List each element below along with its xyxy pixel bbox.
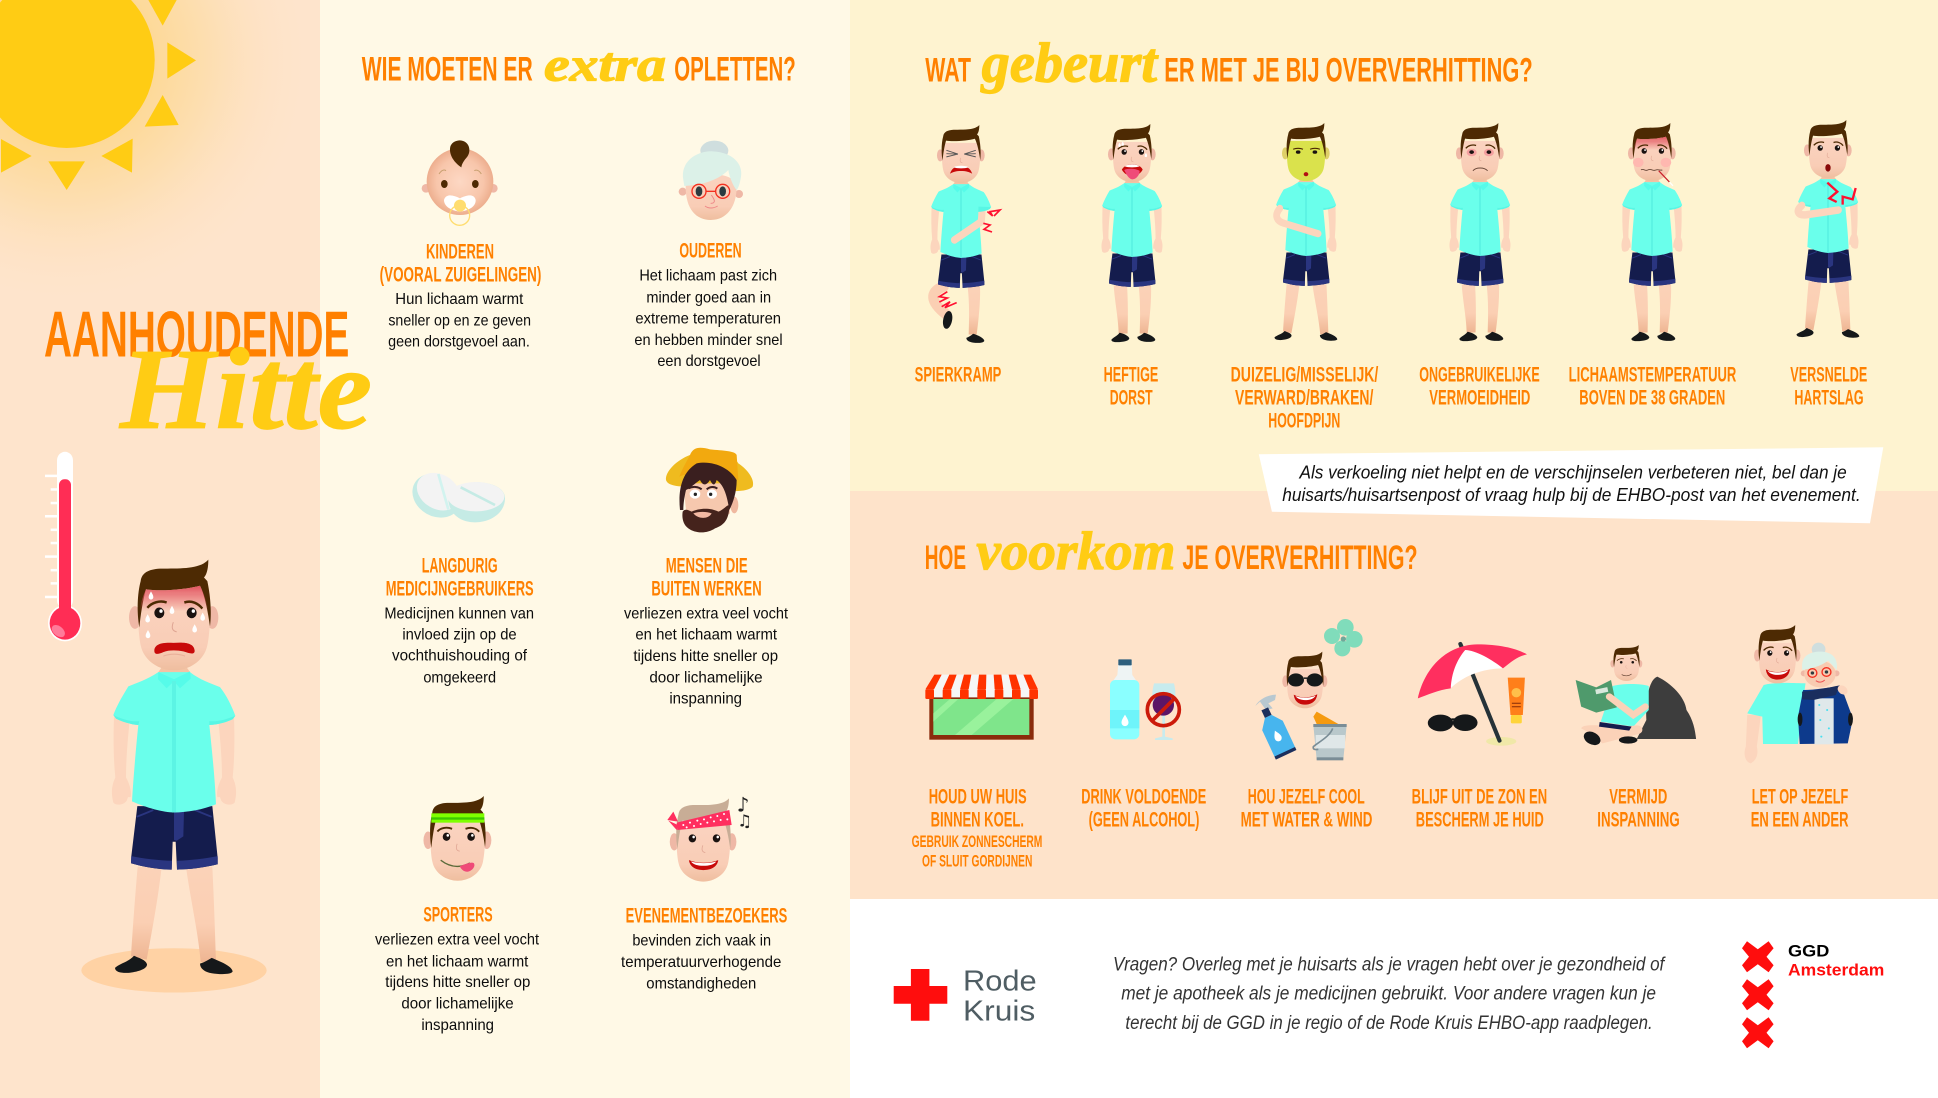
label: MET WATER & WIND [1241,808,1372,832]
symptom: heftige dorst [1101,124,1163,410]
heading: wat gebeurt er met je bij oververhitting [925,33,1533,95]
text: evenementbezoekers: bevinden zich vaak in [632,932,771,949]
heading: kinderen: (VOORAL ZUIGELINGEN) [380,263,541,287]
label: LICHAAMSTEMPERATUUR [1569,363,1737,387]
logo: rode kruis [894,966,1037,1028]
label: GEBRUIK ZONNESCHERM [912,832,1042,851]
symptom: duizelig [1231,123,1378,433]
symptom: ongebruikelijke vermoeidheid [1419,123,1540,410]
text: ouderen [634,267,783,370]
title line: aanhoudende: AANHOUDENDE [44,299,349,371]
illustration: nauseous man with green face [1274,123,1337,341]
text: evenementbezoekers: omstandigheden [646,975,756,992]
label: DORST [1110,386,1153,410]
icon: window with awning [925,675,1038,740]
illustration: man holding chest [1796,120,1859,338]
icon: grandmother [679,141,743,220]
illustration: overheated man [81,560,267,992]
heading: hoe voorkom je oververhitting: HOE [925,539,966,577]
logo: rode kruis: Rode [963,966,1037,998]
text: kinderen [388,291,531,351]
heading: buiten werken [651,554,762,601]
sun with rays [0,0,258,252]
text: sporters: tijdens hitte sneller op [385,974,530,991]
panel: prevention background [850,491,1938,899]
callout: bel hulp: Als verkoeling niet helpt en de verschijnselen verbeteren niet, bel dan je [1299,461,1847,482]
symptom: versnelde hartslag [1790,120,1867,410]
label: (GEEN ALCOHOL) [1089,808,1199,832]
label: HOU JEZELF COOL [1248,785,1365,809]
label: VERWARD/BRAKEN/ [1235,386,1373,410]
text: sporters: en het lichaam warmt [386,953,529,970]
illustration: man with cramp [930,125,1000,343]
icon: baby [422,140,498,225]
label: LET OP JEZELF [1752,785,1848,809]
tip: let op elkaar [1745,625,1853,832]
icon: man with sunglasses, fan, spray and bucket [1254,619,1363,760]
tip: inspanning [1576,645,1696,832]
label [1412,785,1547,832]
heading: wat gebeurt er met je bij oververhitting: gebeurt [980,33,1158,95]
music notes: ♪ [737,793,749,817]
icon: man reading against a rock [1576,645,1696,748]
heading: hoe voorkom je oververhitting: voorkom [976,521,1175,581]
logo: rode kruis: Kruis [963,996,1035,1028]
icon: water bottle and no wine [1110,659,1179,740]
label: DUIZELIG/MISSELIJK/ [1231,363,1378,387]
heading: sporters: SPORTERS [423,903,493,927]
label: BLIJF UIT DE ZON EN [1412,785,1547,809]
group: medicijngebruikers [384,465,534,686]
text: sporters [375,931,540,1034]
text: medicijngebruikers: vochthuishouding of [392,648,528,665]
panel: who should watch out background [320,0,850,1098]
text: kinderen: Hun lichaam warmt [395,291,524,308]
text: vragen: met je apotheek als je medicijnen gebruikt. Voor andere vragen kun je [1121,984,1656,1004]
heading: wat gebeurt er met je bij oververhitting: WAT [925,52,971,90]
heading: hoe voorkom je oververhitting: JE OVERVERHITTING? [1182,539,1418,577]
heading: buiten werken: MENSEN DIE [666,554,748,578]
label: OF SLUIT GORDIJNEN [922,852,1032,871]
illustration: tired man [1449,123,1511,341]
label: BESCHERM JE HUID [1416,808,1544,832]
label: VERMIJD [1609,785,1667,809]
illustration: feverish man with thermometer [1621,123,1683,341]
heading: ouderen: OUDEREN [679,239,742,263]
heading: kinderen [380,240,541,287]
symptom: spierkramp [915,125,1001,387]
icon: pills [404,465,505,526]
icon: man with arm around elderly woman [1745,625,1853,763]
heading: hoe voorkom je oververhitting [925,521,1418,581]
logo: ggd amsterdam: GGD [1788,942,1829,961]
label [1790,363,1867,410]
heading: buiten werken: BUITEN WERKEN [651,577,762,601]
text: medicijngebruikers [384,605,534,686]
heading: wie moeten er extra opletten: OPLETTEN? [674,51,796,89]
label [1751,785,1849,832]
icon: red cross [894,969,947,1021]
text: vragen [1113,954,1666,1034]
text: buiten werken: verliezen extra veel vocht [624,605,789,622]
text: vragen: terecht bij de GGD in je regio of de Rode Kruis EHBO-app raadplegen. [1125,1013,1653,1034]
panel: footer background [850,899,1938,1098]
label: INSPANNING [1597,808,1680,832]
label [1104,363,1158,410]
icon: farmer with hat [666,448,753,532]
label: BINNEN KOEL. [931,808,1024,832]
tip: drinken [1081,659,1206,832]
label: VERMOEIDHEID [1429,386,1530,410]
symptom: lichaamstemperatuur [1569,123,1737,410]
text: sporters: verliezen extra veel vocht [375,931,540,948]
group: sporters [375,796,540,1034]
tip: zon [1412,644,1547,832]
text: kinderen: sneller op en ze geven [388,313,531,330]
heading: wat gebeurt er met je bij oververhitting: ER MET JE BIJ OVERVERHITTING? [1164,52,1533,90]
text: ouderen: en hebben minder snel [634,332,783,349]
label: SPIERKRAMP [915,363,1001,387]
text: ouderen: extreme temperaturen [635,310,781,327]
text: ouderen: Het lichaam past zich [639,267,777,284]
heading: medicijngebruikers: LANGDURIG [422,554,498,578]
label [1241,785,1372,832]
logo: ggd amsterdam: Amsterdam [1788,961,1884,980]
label [1419,363,1540,410]
illustration: thirsty man [1101,124,1163,342]
label: ONGEBRUIKELIJKE [1419,363,1540,387]
text: buiten werken [624,605,789,707]
label: VERSNELDE [1790,363,1867,387]
group: evenementbezoekers [621,793,787,992]
music notes [737,793,752,831]
icon: parasol, sunglasses and sunscreen [1418,644,1527,746]
panel: left background [0,0,320,1098]
label: HARTSLAG [1794,386,1864,410]
music notes: ♫ [737,812,752,831]
text: kinderen: geen dorstgevoel aan. [388,334,530,351]
text: buiten werken: inspanning [669,690,742,707]
text: medicijngebruikers: Medicijnen kunnen van [384,605,534,622]
text: medicijngebruikers: omgekeerd [423,669,496,686]
title [44,299,372,454]
heading: medicijngebruikers [386,554,534,601]
group: ouderen [634,141,783,370]
icon: festival visitor with bandana and music notes [667,793,752,882]
label [1081,785,1206,832]
text: sporters: door lichamelijke [401,995,514,1012]
tip: cool [1241,619,1372,832]
icon: athlete head with headband [423,796,491,881]
heading: medicijngebruikers: MEDICIJNGEBRUIKERS [386,577,534,601]
label: HEFTIGE [1104,363,1158,387]
label: HOOFDPIJN [1268,409,1340,433]
text: buiten werken: en het lichaam warmt [635,626,778,643]
text: ouderen: een dorstgevoel [657,353,761,370]
tip: huis koel [912,675,1042,871]
group: kinderen [380,140,541,351]
text: buiten werken: door lichamelijke [649,669,763,686]
label [912,785,1042,871]
label: BOVEN DE 38 GRADEN [1579,386,1725,410]
title line: hitte: Hitte [119,326,372,454]
text: medicijngebruikers: invloed zijn op de [402,626,517,643]
text: vragen: Vragen? Overleg met je huisarts als je vragen hebt over je gezondheid of [1113,954,1666,976]
text: evenementbezoekers: temperatuurverhogende [621,954,781,971]
label [1597,785,1680,832]
text: sporters: inspanning [421,1017,494,1034]
callout: bel hulp [1259,447,1883,523]
label: EN EEN ANDER [1751,808,1849,832]
text: buiten werken: tijdens hitte sneller op [633,648,778,665]
text: evenementbezoekers [621,932,781,992]
heading: kinderen: KINDEREN [426,240,494,264]
heading: wie moeten er extra opletten: WIE MOETEN ER [362,51,533,89]
group: buiten werken [624,448,789,707]
text: ouderen: minder goed aan in [646,289,771,306]
panel: what happens background [850,0,1938,491]
heading: wie moeten er extra opletten: extra [544,39,666,92]
heading: evenementbezoekers: EVENEMENTBEZOEKERS [626,904,787,928]
heading: wie moeten er extra opletten [362,39,796,92]
callout: bel hulp: huisarts/huisartsenpost of vraag hulp bij de EHBO-post van het evenement. [1282,484,1861,505]
label [1231,363,1378,433]
label: HOUD UW HUIS [929,785,1027,809]
label [1569,363,1737,410]
icon: thermometer [45,452,82,641]
logo: ggd amsterdam [1742,941,1884,1048]
label: DRINK VOLDOENDE [1081,785,1206,809]
